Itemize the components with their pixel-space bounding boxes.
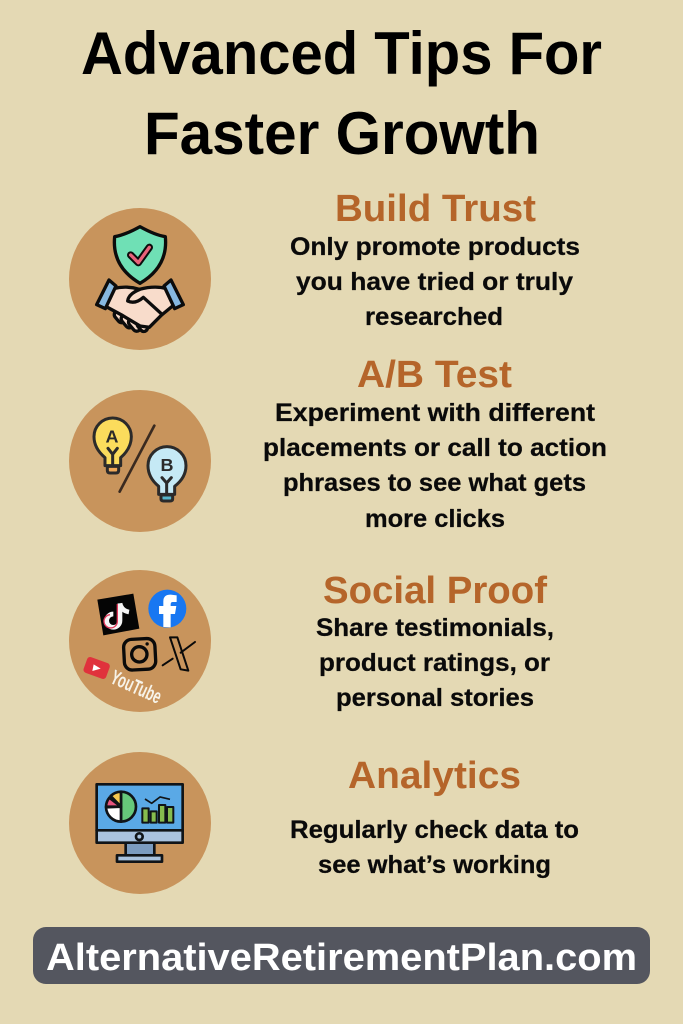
text: build trust body (290, 233, 580, 331)
text: analytics body: Regularly check data to (290, 816, 579, 844)
text: a/b test body (263, 399, 607, 533)
text: analytics body (290, 816, 579, 879)
text: build trust body: you have tried or truly (296, 268, 573, 296)
text: social proof body (316, 614, 554, 712)
icon: social media logos (69, 570, 211, 712)
icon: computer monitor with charts (69, 752, 211, 894)
text: social proof body: product ratings, or (319, 649, 550, 677)
title: Advanced Tips For (81, 20, 602, 87)
heading: analytics: Analytics (348, 755, 521, 797)
text: a/b test body: more clicks (365, 505, 505, 533)
icon: shield and handshake (69, 208, 211, 350)
text: a/b test body: Experiment with different (275, 399, 596, 427)
panel: analytics (69, 752, 579, 894)
title (81, 20, 602, 167)
heading: social proof: Social Proof (323, 570, 547, 612)
icon: a/b light bulbs: B (160, 455, 173, 475)
heading: build trust: Build Trust (335, 188, 536, 230)
text: build trust body: Only promote products (290, 233, 580, 261)
text: analytics body: see what’s working (318, 851, 551, 879)
icon: social media logos: YouTube (107, 666, 165, 709)
panel: build trust (69, 188, 580, 350)
text: a/b test body: phrases to see what gets (283, 469, 586, 497)
text: build trust body: researched (365, 303, 503, 331)
footer banner (33, 927, 650, 984)
panel: social proof (69, 570, 554, 712)
panel: a/b test (69, 354, 607, 533)
heading: a/b test: A/B Test (357, 354, 512, 396)
footer banner: AlternativeRetirementPlan.com (46, 937, 637, 979)
text: social proof body: personal stories (336, 684, 534, 712)
icon: a/b light bulbs: A (105, 426, 118, 446)
text: a/b test body: placements or call to action (263, 434, 607, 462)
icon: a/b light bulbs (69, 390, 211, 532)
text: social proof body: Share testimonials, (316, 614, 554, 642)
title: Faster Growth (144, 100, 540, 167)
